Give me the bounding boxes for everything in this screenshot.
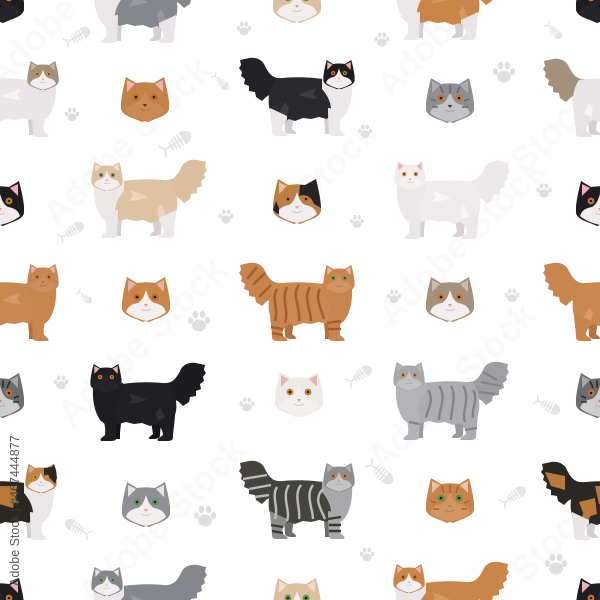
watermark text: Adobe <box>367 0 475 105</box>
cat: black and white <box>239 58 355 136</box>
cat: red tabby <box>239 263 355 341</box>
watermark text: Stock <box>287 111 386 210</box>
head: grey tabby <box>426 78 474 123</box>
head: red tabby <box>426 478 474 523</box>
head: taupe and white <box>426 277 474 322</box>
head: orange and white <box>122 277 170 322</box>
stock id text: Adobe Stock | #467444877 <box>8 435 22 586</box>
watermark text: Stock <box>502 81 600 180</box>
cat: white <box>394 161 510 239</box>
cat: buff and white <box>91 160 207 238</box>
cat: silver tabby <box>393 362 509 440</box>
watermark text: Adobe Stock <box>369 148 554 333</box>
head: grey and white <box>122 482 170 527</box>
cat: grey and white <box>91 0 207 600</box>
watermark text: Adobe Stock <box>359 293 544 478</box>
cat: solid black <box>90 363 206 441</box>
cat: dark tabby <box>239 461 355 539</box>
cat: tortoiseshell <box>0 462 600 540</box>
watermark text: Stock <box>502 491 600 590</box>
cat: solid orange <box>0 263 600 341</box>
cat: orange and white <box>393 0 509 600</box>
watermark text: Adobe Stock <box>34 48 219 233</box>
head: cream white <box>275 372 323 417</box>
head: black and white <box>0 181 600 226</box>
head: silver dark tabby <box>0 373 600 418</box>
cat: taupe and white <box>0 59 600 137</box>
watermark text: Adobe Stock <box>49 248 234 433</box>
fish bones <box>57 21 564 540</box>
paw prints <box>53 22 567 575</box>
head: calico <box>273 179 321 224</box>
head: beige <box>273 0 321 600</box>
head: orange <box>121 77 169 122</box>
